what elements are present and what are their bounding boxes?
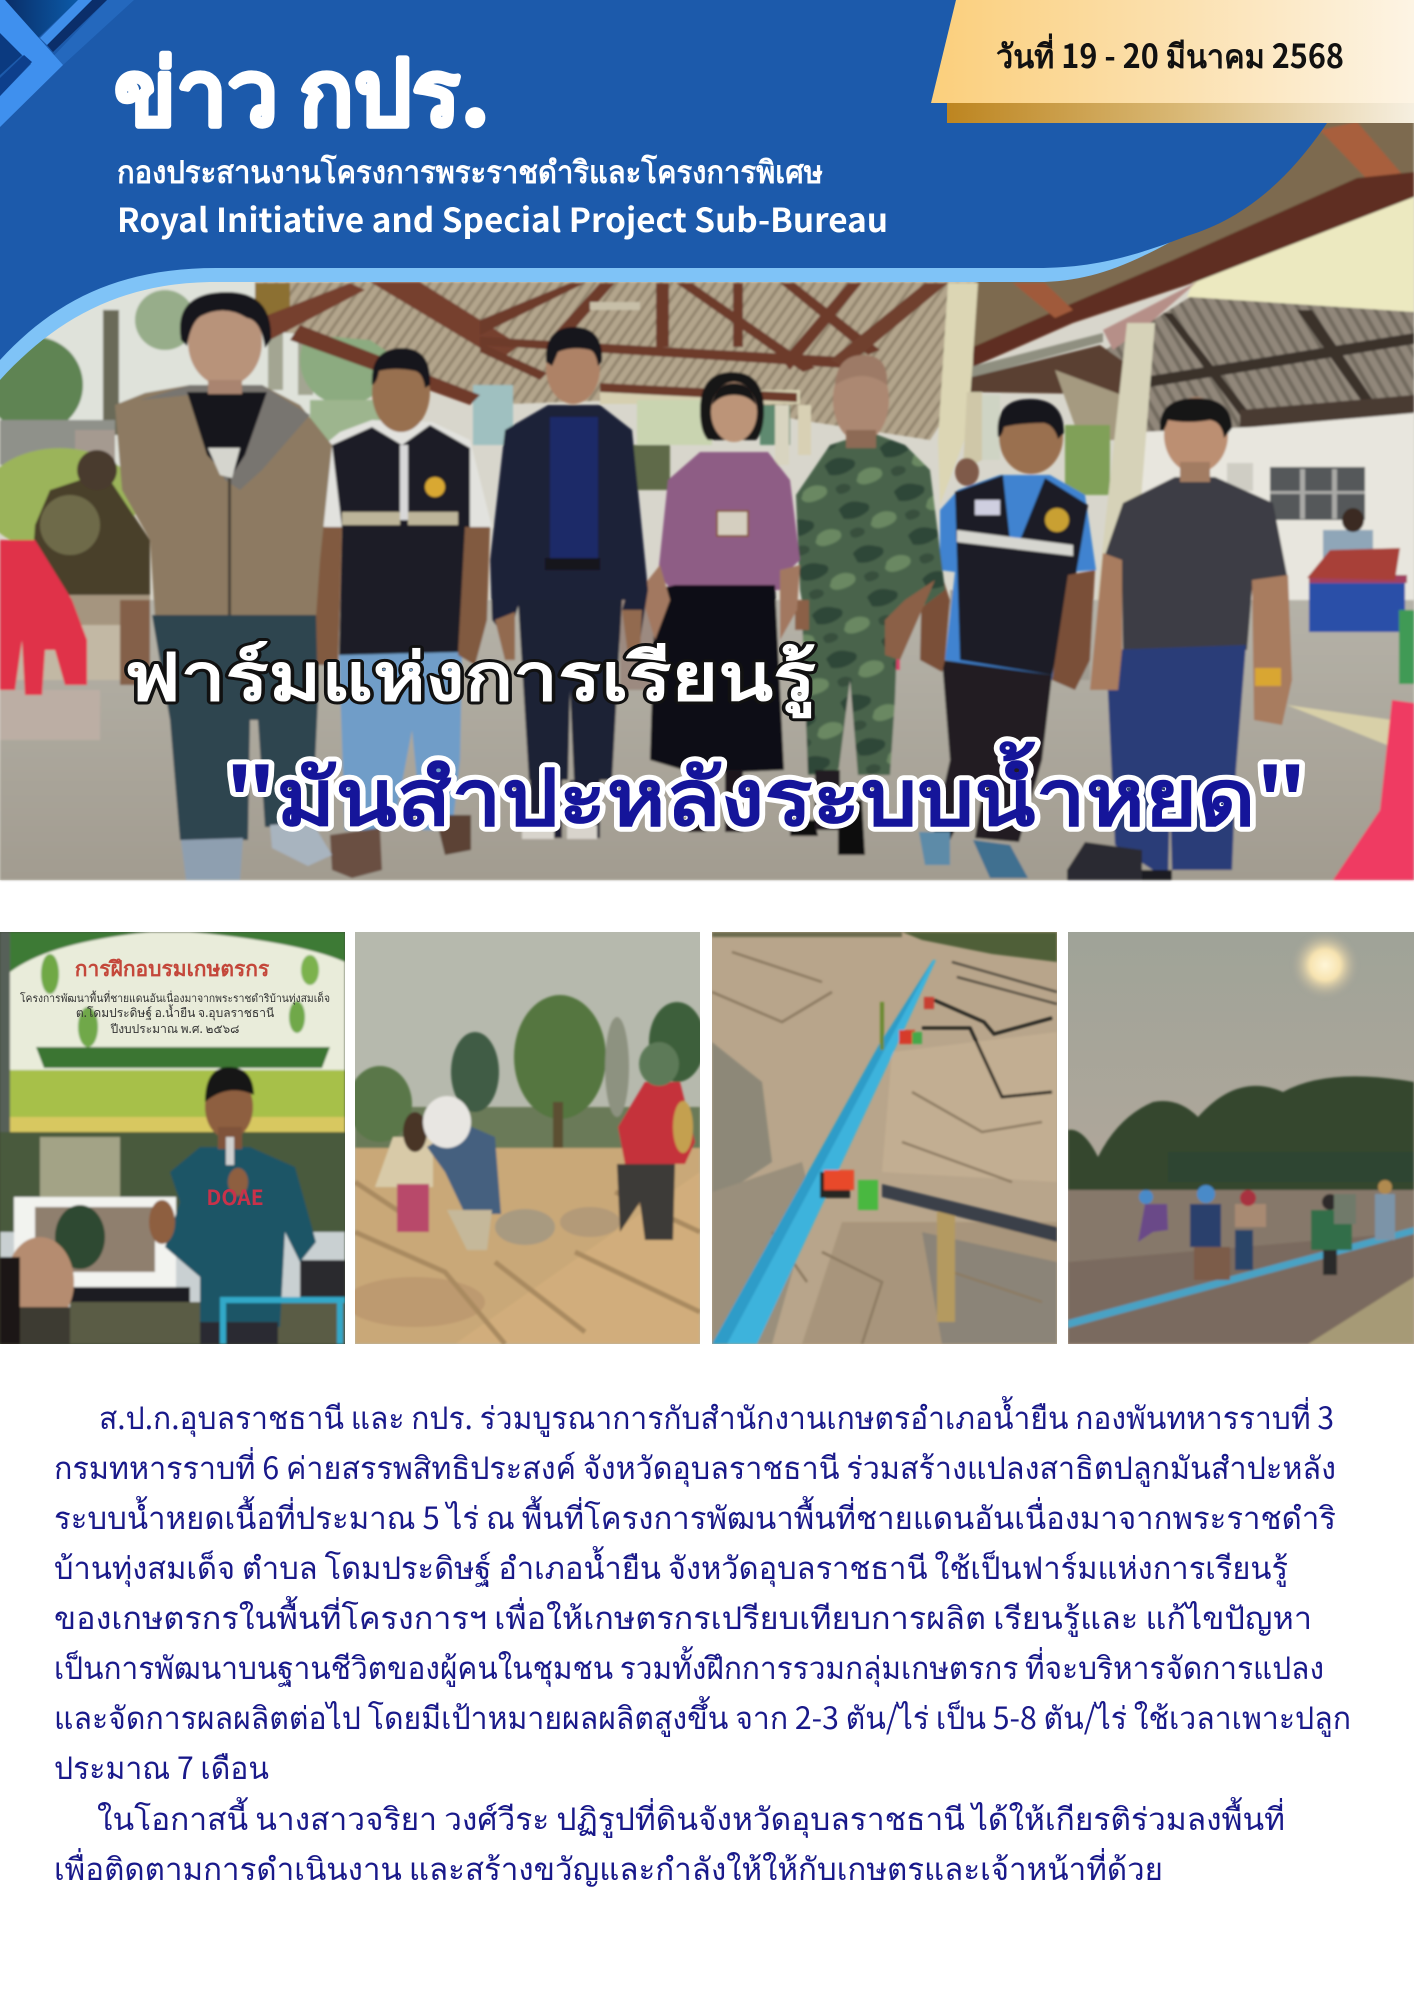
soil <box>355 1148 700 1344</box>
soil patches <box>712 1042 772 1202</box>
hero photo: group at the learning farm <box>0 120 1414 880</box>
paragraph 1: ประมาณ 7 เดือน <box>54 1743 269 1788</box>
date ribbon <box>931 0 1414 123</box>
lower corrugated under eave <box>1055 370 1135 440</box>
background red chairs <box>655 590 675 690</box>
main roof <box>255 282 975 440</box>
paragraph 1: กรมทหารราบที่ 6 ค่ายสรรพสิทธิประสงค์ จังหวัดอุบลราชธานี ร่วมสร้างแปลงสาธิตปลูกมันสำปะหลัง <box>54 1443 1336 1488</box>
woman <box>375 1137 433 1187</box>
pvc frame <box>220 1297 345 1303</box>
paragraph 1: ส.ป.ก.อุบลราชธานี และ กปร. ร่วมบูรณาการกับสำนักงานเกษตรอำเภอน้ำยืน กองพันทหารราบที่ 3 <box>99 1393 1334 1438</box>
person 5 soldier <box>796 432 945 620</box>
date text: วันที่ 19 - 20 มีนาคม 2568 <box>996 30 1344 78</box>
forest backdrop <box>0 1132 345 1302</box>
screen <box>14 1197 176 1289</box>
blue pipe <box>1068 1227 1414 1328</box>
blue cooler box <box>1309 578 1405 632</box>
speaker <box>165 1147 316 1327</box>
person 1 <box>115 385 332 617</box>
cream wall <box>1187 197 1414 312</box>
treeline <box>902 932 1057 962</box>
red chair bottom right <box>1333 700 1414 880</box>
treeline <box>1068 1076 1414 1192</box>
photo 3: drip irrigation pipe <box>712 932 1057 1344</box>
body text <box>54 1393 1351 1889</box>
paragraph 1: เป็นการพัฒนาบนฐานชีวิตของผู้คนในชุมชน รวมทั้งฝึกการรวมกลุ่มเกษตรกร ที่จะบริหารจัดการแปลง <box>54 1643 1324 1688</box>
background head <box>955 458 979 486</box>
audience <box>6 1237 74 1327</box>
person 7 <box>1105 477 1288 650</box>
cream columns <box>938 283 978 505</box>
concrete floor <box>0 600 1414 880</box>
banner text: ปีงบประมาณ พ.ศ. ๒๕๖๘ <box>110 1020 239 1037</box>
white building <box>1140 413 1414 640</box>
header banner: blue shape <box>0 0 1327 360</box>
subtitle thai: กองประสานงานโครงการพระราชดำริและโครงการพิเศษ <box>117 147 823 192</box>
corner chevron decoration <box>0 0 134 127</box>
blue main pipe <box>712 960 936 1344</box>
banner text: ต.โดมประดิษฐ์ อ.น้ำยืน จ.อุบลราชธานี <box>76 1004 274 1021</box>
sky and trees on the left <box>0 280 350 510</box>
seated person on the right <box>1323 530 1373 562</box>
seated man on the left <box>32 480 150 610</box>
photo 4: field at sunset <box>1068 932 1414 1344</box>
subtitle english: Royal Initiative and Special Project Sub-Bureau <box>117 194 888 242</box>
person 3 <box>490 405 648 640</box>
paragraph 2: ในโอกาสนี้ นางสาวจริยา วงศ์วีระ ปฏิรูปที่ดินจังหวัดอุบลราชธานี ได้ให้เกียรติร่วมลงพื้นที่ <box>97 1794 1285 1839</box>
photo 2: farmers planting <box>355 932 700 1344</box>
soil <box>1068 1190 1414 1344</box>
header banner: light blue swoosh <box>0 120 1187 380</box>
paragraph 1: ของเกษตรกรในพื้นที่โครงการฯ เพื่อให้เกษตรกรเปรียบเทียบการผลิต เรียนรู้และ แก้ไขปัญหา <box>54 1593 1312 1638</box>
trees <box>355 1107 700 1152</box>
workers <box>1190 1204 1221 1247</box>
banner text: การฝึกอบรมเกษตรกร <box>75 953 270 983</box>
sun <box>1291 931 1359 999</box>
photo 1: training speaker <box>0 932 345 1344</box>
person 6 <box>940 475 1096 680</box>
paragraph 2: เพื่อติดตามการดำเนินงาน และสร้างขวัญและกำลังให้ให้กับเกษตรและเจ้าหน้าที่ด้วย <box>54 1844 1163 1889</box>
man in denim <box>427 1124 501 1214</box>
banner text <box>20 953 330 1212</box>
paragraph 1: บ้านทุ่งสมเด็จ ตำบล โดมประดิษฐ์ อำเภอน้ำยืน จังหวัดอุบลราชธานี ใช้เป็นฟาร์มแห่งการเรียนรู้ <box>54 1543 1288 1588</box>
banner text: DOAE <box>206 1182 264 1212</box>
paragraph 2 <box>54 1794 1285 1889</box>
table <box>70 1302 345 1344</box>
red plastic chair <box>0 540 87 695</box>
roof wedge top right <box>973 120 1414 360</box>
hero heading line 1: ฟาร์มแห่งการเรียนรู้ <box>124 624 816 720</box>
man in red <box>618 1082 695 1164</box>
banner behind group <box>637 400 712 445</box>
valves <box>820 1172 850 1198</box>
person 2 <box>305 420 492 655</box>
paragraph 1: และจัดการผลผลิตต่อไป โดยมีเป้าหมายผลผลิตสูงขึ้น จาก 2-3 ตัน/ไร่ เป็น 5-8 ตัน/ไร่ ใช้เวลาเพาะปลูก <box>54 1693 1351 1738</box>
banner <box>10 932 345 1132</box>
banner text: โครงการพัฒนาพื้นที่ชายแดนอันเนื่องมาจากพระราชดำริบ้านทุ่งสมเด็จ <box>20 990 330 1006</box>
person 4 woman <box>658 452 800 590</box>
gap behind person 6 <box>1065 425 1110 495</box>
paragraph 1: ระบบน้ำหยดเนื้อที่ประมาณ 5 ไร่ ณ พื้นที่โครงการพัฒนาพื้นที่ชายแดนอันเนื่องมาจากพระราชดำริ <box>54 1493 1336 1538</box>
black drip lines <box>882 1184 1057 1242</box>
hero heading line 2: "มันสำปะหลังระบบน้ำหยด" <box>225 736 1307 848</box>
title: ข่าว กปร. <box>114 19 490 152</box>
paragraph 1 <box>54 1393 1351 1788</box>
roof beams <box>370 282 520 360</box>
right lower roof <box>1073 297 1414 437</box>
